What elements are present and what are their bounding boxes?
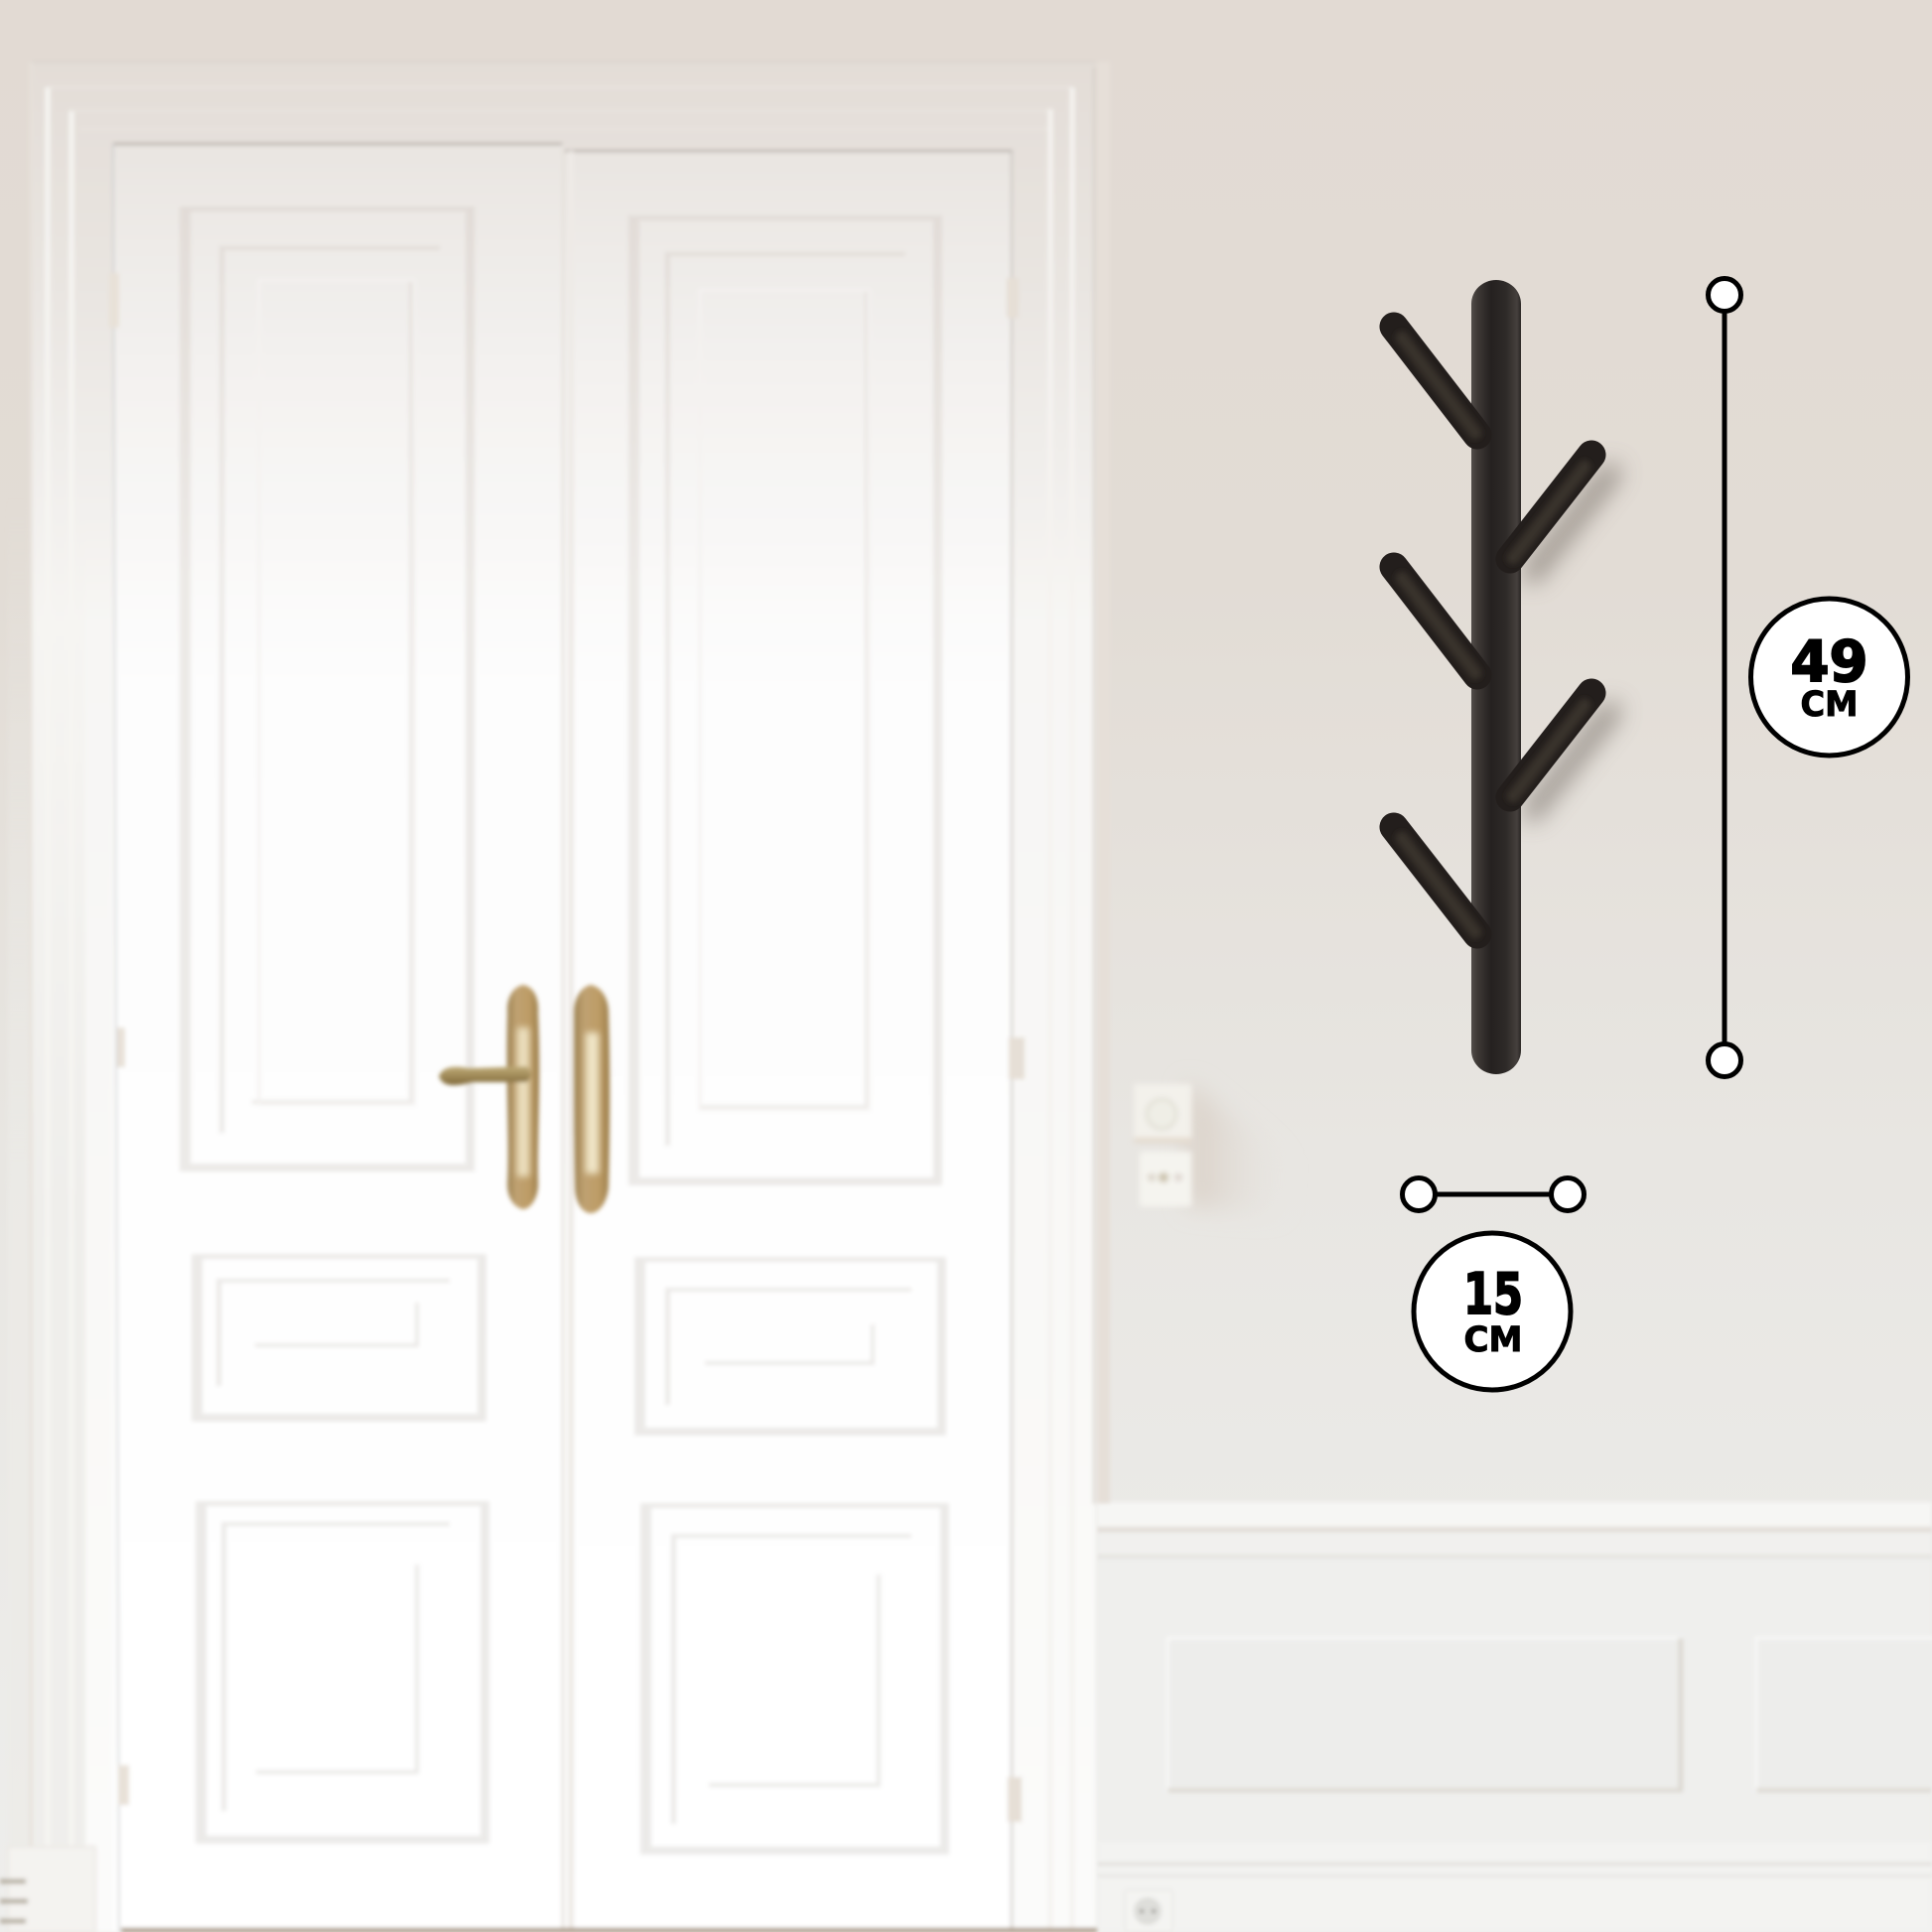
left leaf bottom panel: [196, 1501, 489, 1844]
left lever: [439, 1066, 530, 1085]
wall panel right: [1756, 1638, 1932, 1793]
switch shadow: [1187, 1082, 1291, 1216]
baseboard: [1097, 1842, 1932, 1932]
height dimension line: [1708, 278, 1741, 1076]
dimmer plate: [1134, 1084, 1191, 1143]
height label: 49 cm: CM: [1801, 685, 1859, 725]
width label: 15 cm: 15: [1463, 1262, 1523, 1327]
height label: 49 cm: 49: [1791, 629, 1868, 695]
wall panel left: [1168, 1638, 1684, 1793]
coat rack: [1394, 280, 1611, 1082]
left door leaf: [109, 144, 563, 1932]
right door leaf: [565, 151, 1025, 1932]
floor strip: [121, 1928, 1097, 1932]
floor socket: [1125, 1890, 1173, 1932]
right leaf top panel: [628, 215, 942, 1185]
radiator edge: [0, 1881, 28, 1921]
rack post: [1471, 280, 1521, 1074]
door frame and double doors: [0, 62, 1110, 1932]
wall switches: [1134, 1082, 1291, 1216]
rack branches: [1394, 327, 1591, 934]
rack shadows: [1531, 298, 1611, 1082]
right leaf hinges: [1007, 278, 1025, 1822]
left leaf middle panel: [192, 1254, 486, 1422]
width dimension line: [1402, 1177, 1585, 1211]
left leaf hinges: [109, 273, 129, 1805]
outlet plate: [1140, 1152, 1191, 1206]
left handle plate: [506, 985, 539, 1209]
width label: 15 cm: CM: [1463, 1320, 1523, 1360]
height label: 49 cm: [1751, 599, 1908, 756]
wainscot panelling: [1097, 1502, 1932, 1932]
right leaf middle panel: [634, 1257, 946, 1436]
left leaf top panel: [180, 207, 475, 1172]
chair rail: [1097, 1502, 1932, 1559]
width label: 15 cm: [1414, 1233, 1571, 1390]
right handle plate: [574, 985, 610, 1213]
right leaf bottom panel: [640, 1503, 949, 1855]
plinth block: [8, 1847, 95, 1932]
brass door handles: [439, 985, 610, 1213]
door frame: [8, 62, 1110, 1932]
